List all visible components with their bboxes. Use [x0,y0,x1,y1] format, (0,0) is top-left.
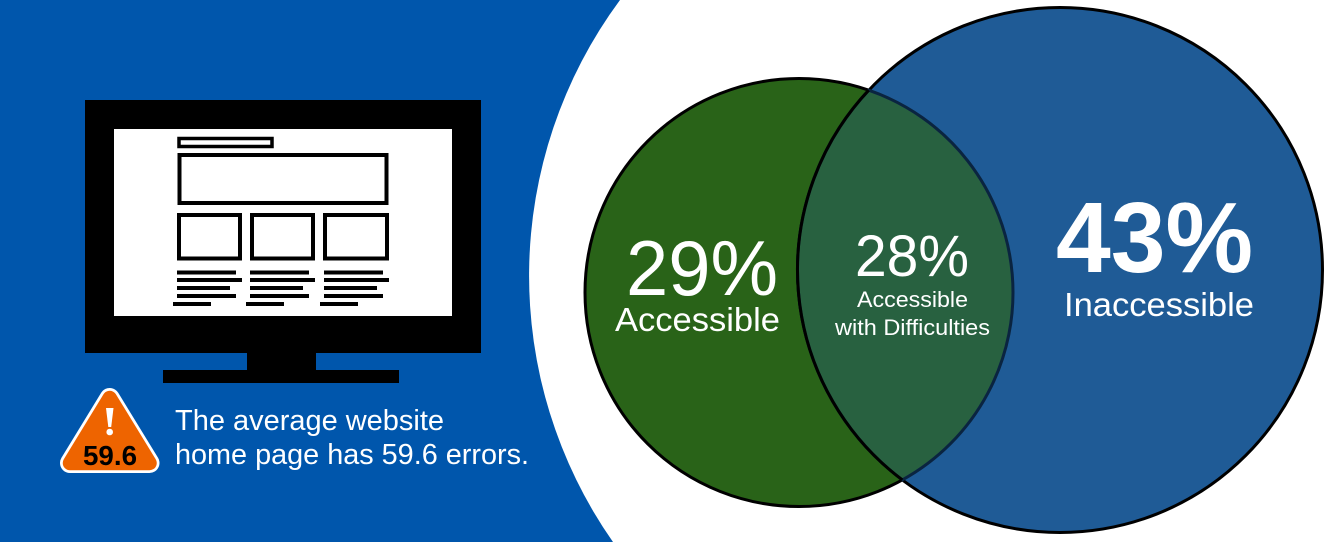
circle: accessible [585,78,1013,506]
label: 29% accessible: Accessible [615,301,780,338]
overlap: accessible with difficulties [797,90,1013,480]
circle: inaccessible [798,8,1322,532]
icon: warning triangle 59.6 [70,398,150,471]
label: 29% accessible: 29% [626,224,778,312]
text: average errors statement: home page has 59.6 errors. [175,439,529,471]
icon: warning triangle 59.6: 59.6 [83,440,137,471]
label: 28% accessible with difficulties: 28% [855,224,969,289]
text: average errors statement: The average website [175,405,444,437]
label: 43% inaccessible: Inaccessible [1064,287,1254,324]
label: 28% accessible with difficulties: Accessible [857,287,968,312]
label: 43% inaccessible: 43% [1056,182,1253,294]
text: average errors statement [175,405,529,471]
label: 28% accessible with difficulties [834,224,990,340]
venn diagram [585,8,1322,532]
label: 28% accessible with difficulties: with Difficulties [834,315,990,340]
icon: computer monitor with wireframe page [85,100,481,383]
